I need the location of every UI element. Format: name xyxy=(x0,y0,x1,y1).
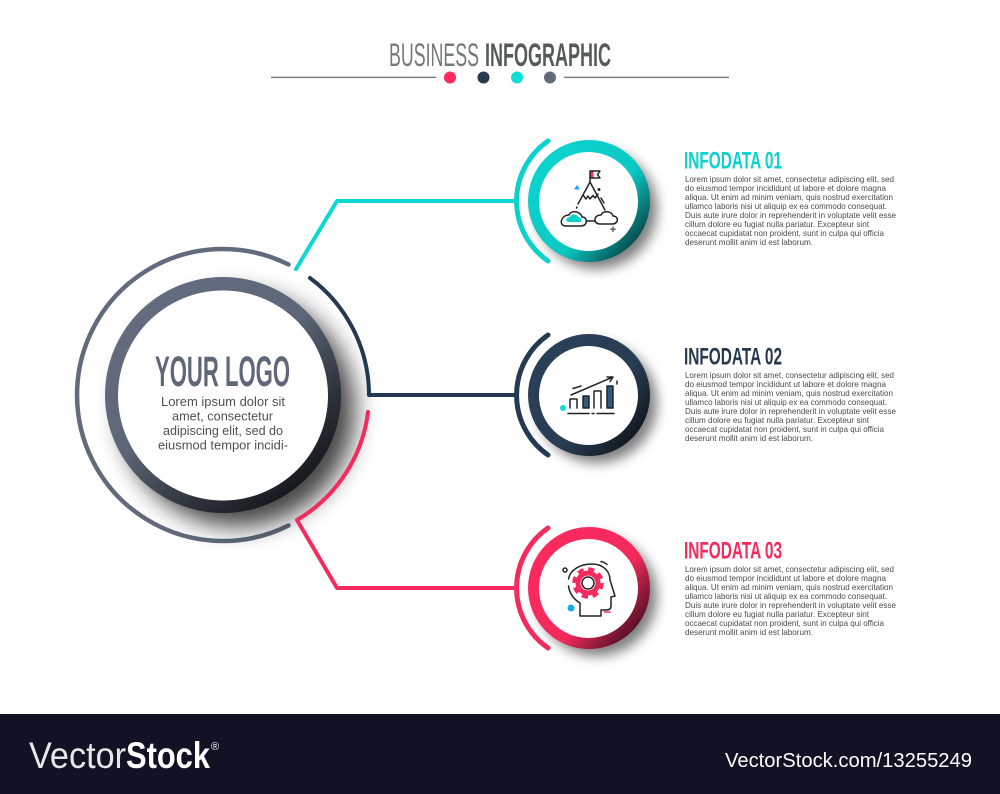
footer image id: VectorStock.com/13255249 xyxy=(725,750,972,772)
logo description: Lorem ipsum dolor sit xyxy=(161,394,285,409)
body 01: cillum dolore eu fugiat nulla pariatur. Excepteur sint xyxy=(685,219,870,229)
body 01: Duis aute irure dolor in reprehenderit in voluptate velit esse xyxy=(685,210,896,220)
text block 03 xyxy=(684,538,896,637)
body 02: deserunt mollit anim id est laborum. xyxy=(685,433,813,443)
logo description: amet, consectetur xyxy=(172,408,274,424)
body 03: occaecat cupidatat non proident, sunt in culpa qui officia xyxy=(685,618,884,628)
heading 01: INFODATA 01 xyxy=(684,148,782,174)
connector: navy xyxy=(310,278,516,395)
body 03: ullamco laboris nisi ut aliquip ex ea commodo consequat. xyxy=(685,591,887,601)
icon: head with gear xyxy=(563,562,615,616)
footer brand: ® xyxy=(211,741,219,753)
node 01: teal circle with mountain icon xyxy=(517,140,657,269)
outer grey arc xyxy=(77,249,289,541)
title: INFOGRAPHIC xyxy=(485,37,611,73)
body 03: deserunt mollit anim id est laborum. xyxy=(685,627,813,637)
body 01: ullamco laboris nisi ut aliquip ex ea commodo consequat. xyxy=(685,201,887,211)
logo description: eiusmod tempor incidi- xyxy=(158,438,288,452)
footer bar xyxy=(0,714,1000,794)
text block 02 xyxy=(684,344,896,443)
body 02: Duis aute irure dolor in reprehenderit in voluptate velit esse xyxy=(685,406,896,416)
body 01: aliqua. Ut enim ad minim veniam, quis nostrud exercitation xyxy=(685,192,893,202)
title divider with dots xyxy=(271,72,729,84)
connector: pink xyxy=(297,412,516,588)
body 02: ullamco laboris nisi ut aliquip ex ea commodo consequat. xyxy=(685,397,887,407)
node 03: pink circle with head icon xyxy=(517,527,657,656)
node 02: navy circle with chart icon xyxy=(517,334,657,463)
footer brand: Stock xyxy=(126,735,210,776)
heading 02: INFODATA 02 xyxy=(684,344,782,370)
body 03: Lorem ipsum dolor sit amet, consectetur adipiscing elit, sed xyxy=(685,564,894,574)
body 03: aliqua. Ut enim ad minim veniam, quis nostrud exercitation xyxy=(685,582,893,592)
icon: mountain with flag and clouds xyxy=(561,171,617,232)
body 03 xyxy=(685,564,896,637)
body 02: aliqua. Ut enim ad minim veniam, quis nostrud exercitation xyxy=(685,388,893,398)
body 02: do eiusmod tempor incididunt ut labore et dolore magna xyxy=(685,379,886,389)
logo description: adipiscing elit, sed do xyxy=(163,423,283,438)
heading 03: INFODATA 03 xyxy=(684,538,782,564)
connector: teal xyxy=(296,201,516,269)
body 01: deserunt mollit anim id est laborum. xyxy=(685,237,813,247)
logo description xyxy=(158,394,288,452)
body 01: do eiusmod tempor incididunt ut labore et dolore magna xyxy=(685,183,886,193)
body 02: Lorem ipsum dolor sit amet, consectetur adipiscing elit, sed xyxy=(685,370,894,380)
icon: growth bar chart xyxy=(560,377,617,414)
body 02: occaecat cupidatat non proident, sunt in culpa qui officia xyxy=(685,424,884,434)
body 02 xyxy=(685,370,896,443)
footer brand xyxy=(29,735,219,776)
logo heading: YOUR LOGO xyxy=(155,348,290,396)
body 03: cillum dolore eu fugiat nulla pariatur. Excepteur sint xyxy=(685,609,870,619)
footer brand: Vector xyxy=(29,735,126,776)
body 01 xyxy=(685,174,896,247)
body 03: Duis aute irure dolor in reprehenderit in voluptate velit esse xyxy=(685,600,896,610)
body 01: occaecat cupidatat non proident, sunt in culpa qui officia xyxy=(685,228,884,238)
body 02: cillum dolore eu fugiat nulla pariatur. Excepteur sint xyxy=(685,415,870,425)
central shadow xyxy=(121,293,355,527)
body 03: do eiusmod tempor incididunt ut labore et dolore magna xyxy=(685,573,886,583)
central gradient ring xyxy=(105,277,341,513)
text block 01 xyxy=(684,148,896,247)
body 01: Lorem ipsum dolor sit amet, consectetur adipiscing elit, sed xyxy=(685,174,894,184)
central logo circle xyxy=(77,249,355,541)
central white disc xyxy=(118,290,328,500)
title: BUSINESS xyxy=(389,37,479,73)
